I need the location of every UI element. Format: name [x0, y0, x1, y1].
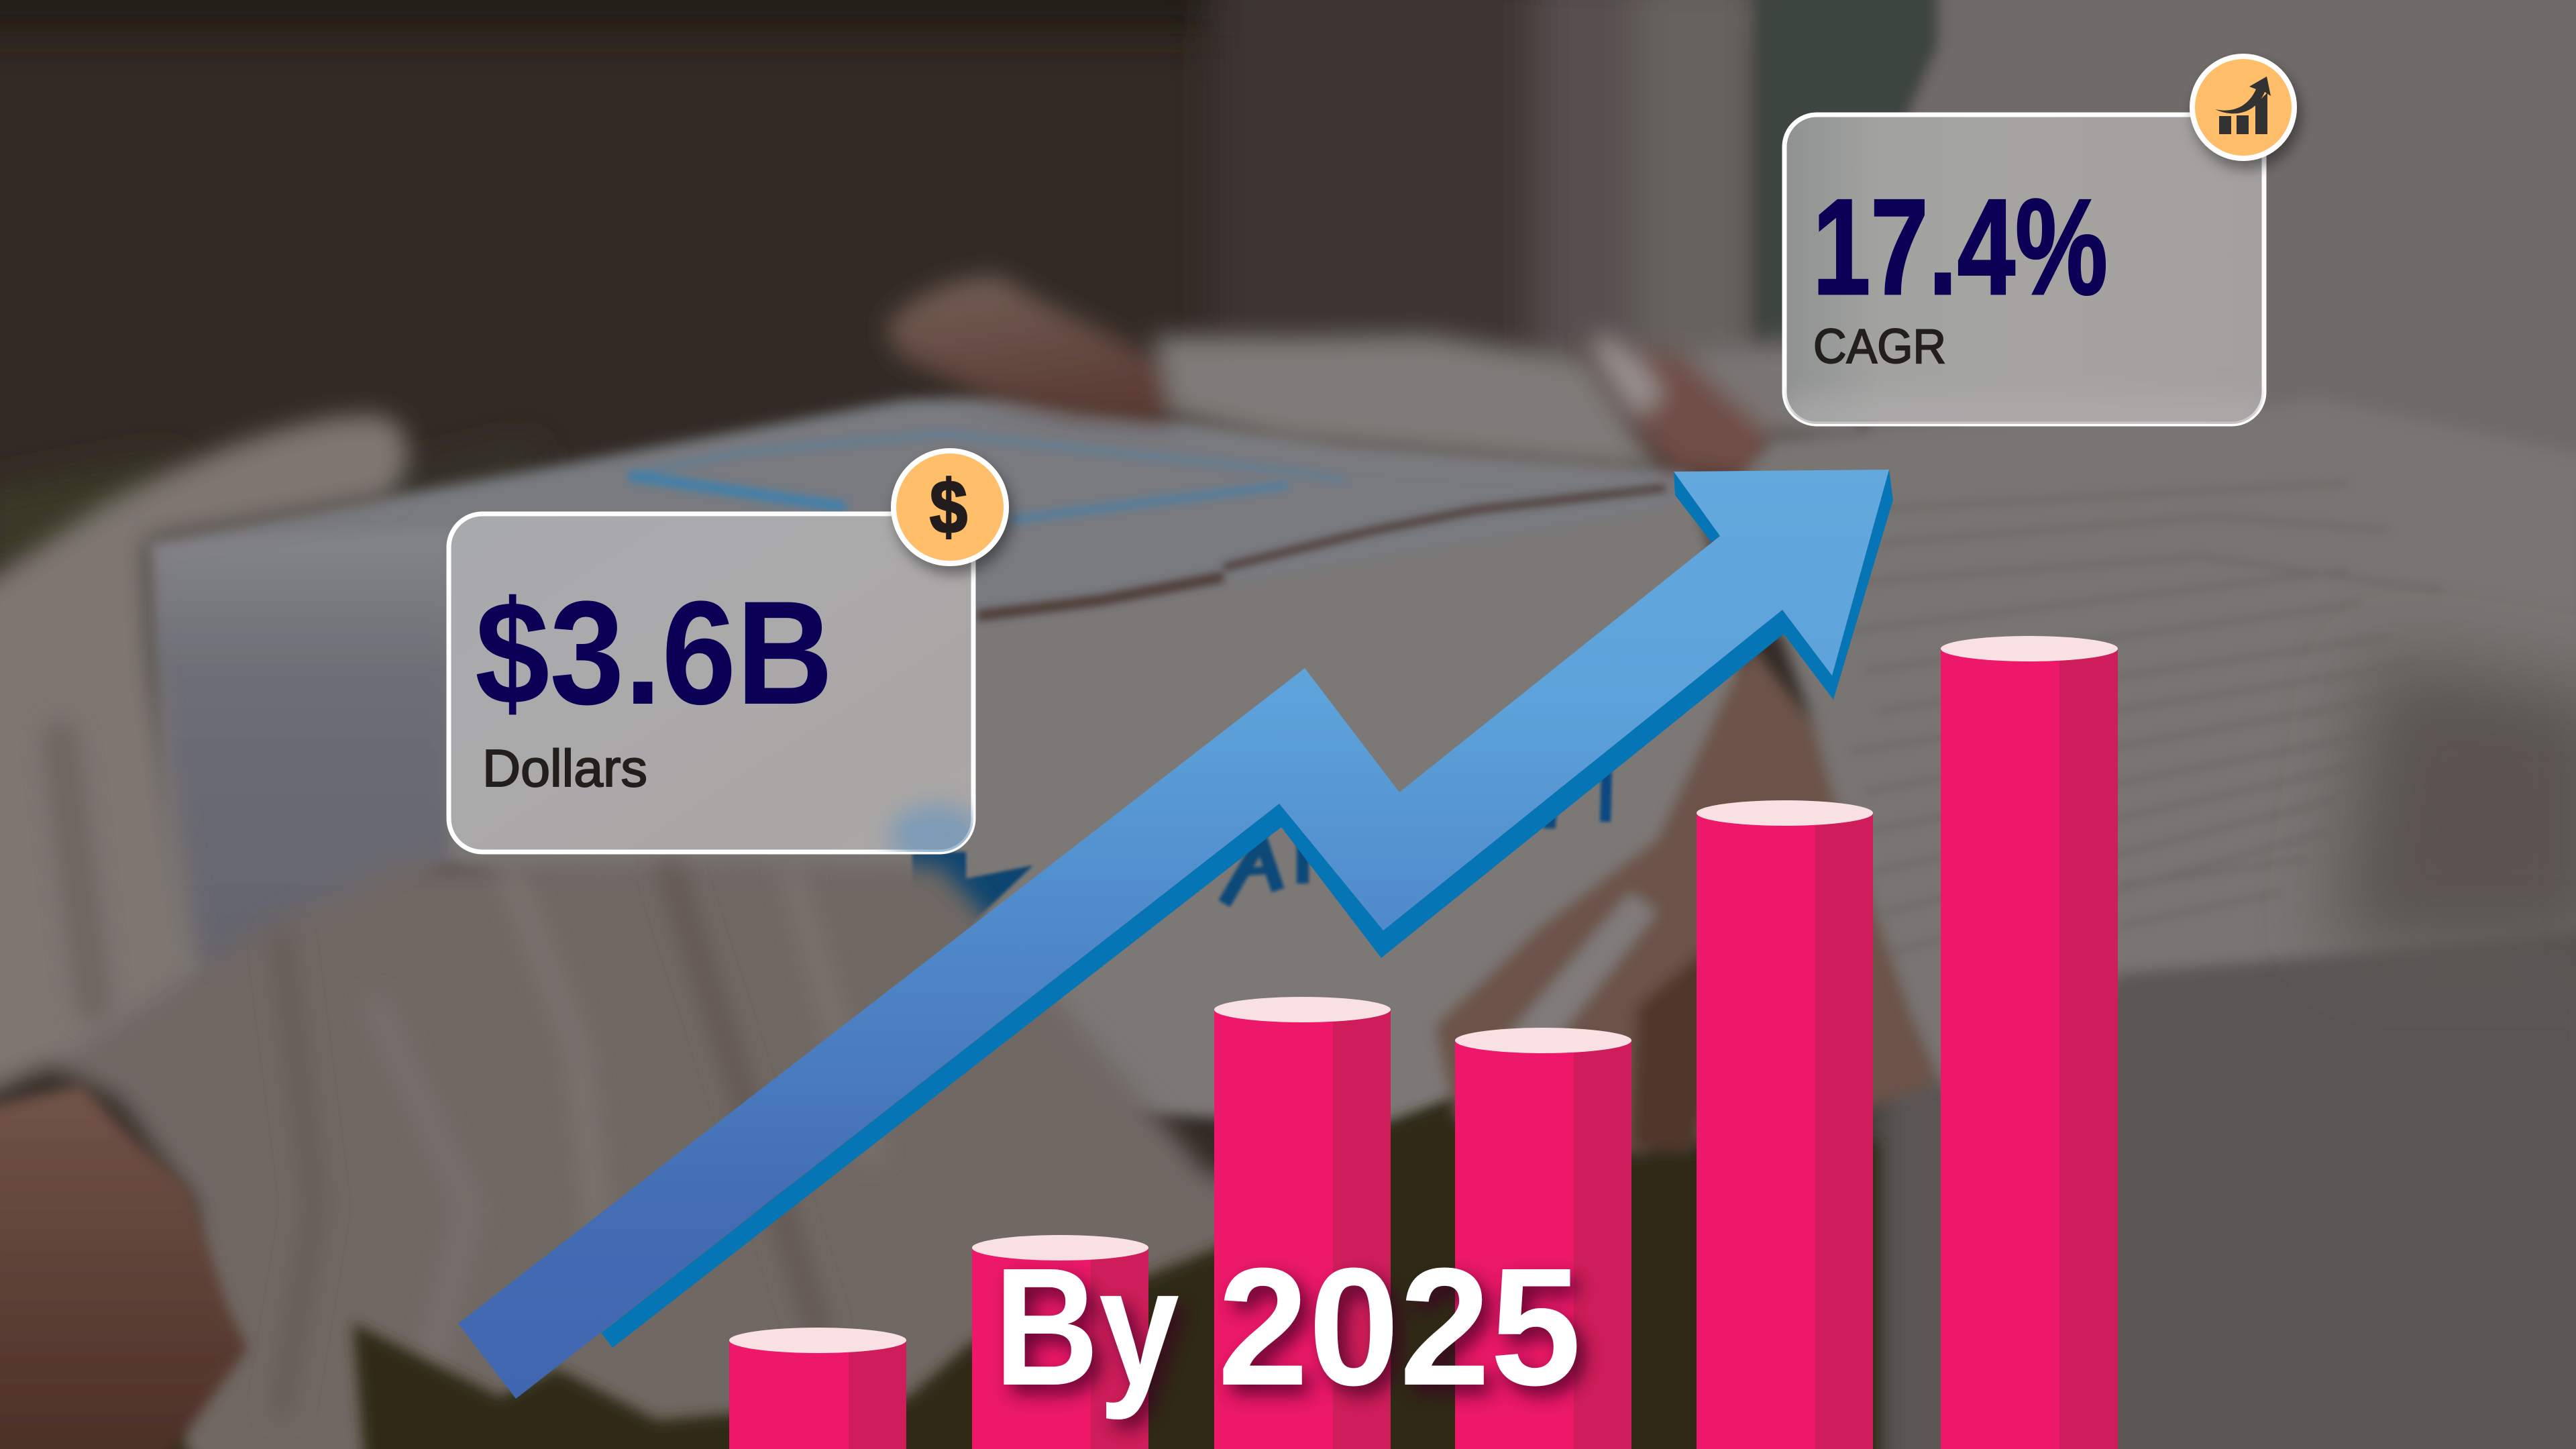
icon: dollar badge: $: [930, 465, 967, 549]
parcel box: [148, 396, 1825, 1127]
arrow face: [458, 470, 1889, 1399]
bar 2: [972, 1235, 1148, 1449]
title: By 2025: 2025: [1218, 1233, 1581, 1420]
value: 17.4%: 17.4%: [1813, 171, 2108, 323]
top finger and sleeve: [885, 276, 1872, 483]
bar 6: [1941, 636, 2118, 1449]
bar 4: [1455, 1028, 1631, 1449]
arrow side shading: [601, 470, 1893, 1348]
label: Dollars: Dollars: [482, 739, 647, 798]
bar chart: six rising cylinders: [729, 636, 2118, 1449]
label: CAGR: CAGR: [1813, 320, 1946, 374]
lighter bottom haze inside card: [1784, 396, 2264, 456]
icon: dollar badge: [894, 451, 1006, 564]
bar 3: [1214, 997, 1391, 1449]
card: market size: [449, 451, 1006, 865]
title: By 2025: [994, 1233, 1581, 1420]
title: By 2025: By: [994, 1233, 1179, 1420]
gloved hand, left: [0, 415, 1878, 1449]
knit sweater, right: [1436, 397, 2576, 1449]
value: $3.6B: $3.6B: [475, 570, 833, 735]
arrow: rising zigzag trend: [458, 470, 1893, 1399]
olive ground: [121, 1100, 1878, 1449]
bar 5: [1697, 800, 1873, 1449]
bar 1: [729, 1328, 906, 1449]
blue blur inside card: [889, 805, 983, 865]
icon: growth chart badge: [2192, 56, 2294, 158]
card: CAGR: [1784, 56, 2294, 456]
